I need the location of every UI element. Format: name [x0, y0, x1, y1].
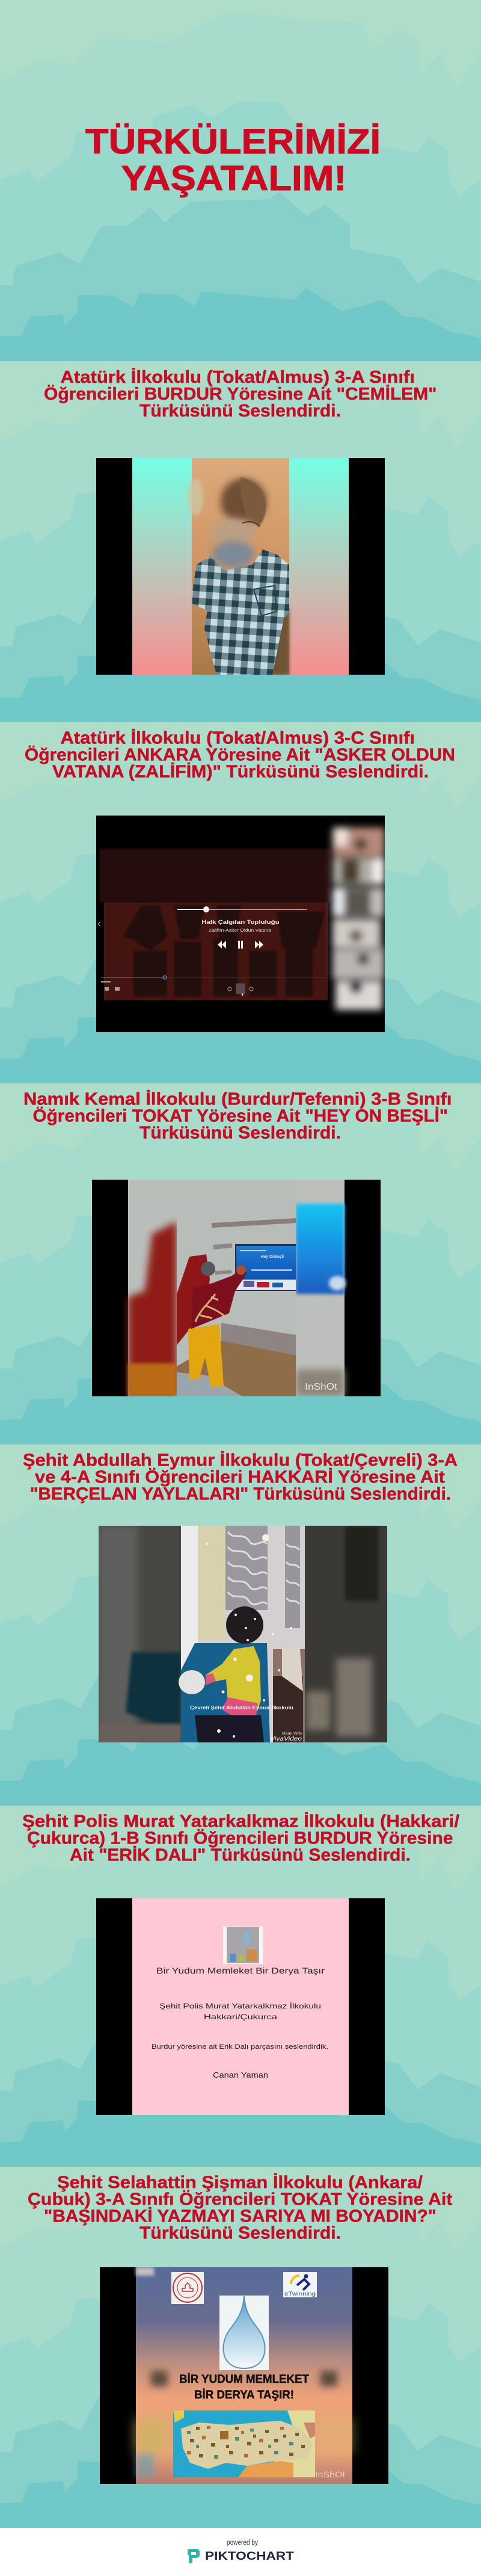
video still: girl in yellow on blue chair: [99, 1526, 387, 1742]
room: [177, 1180, 296, 1366]
eTwinning logo: eTwinning: [284, 2291, 316, 2297]
heading: section 6: [28, 2173, 453, 2243]
water drop: [219, 2296, 269, 2370]
curtains: [198, 1526, 305, 1742]
heading: section 2: Öğrencileri ANKARA Yöresine Ait "ASKER OLDUN: [25, 745, 455, 764]
player controls: [98, 906, 326, 996]
Turkey map: [173, 2410, 315, 2477]
video still: girl in costume pointing at TV: Hey Onbeşli: [261, 1255, 284, 1259]
video still: girl in yellow on blue chair: VivaVideo: [270, 1736, 302, 1742]
poster slogan: BİR DERYA TAŞIR!: [194, 2389, 294, 2401]
heading: section 4: "BERÇELAN YAYLALARI" Türküsünü Seslendirdi.: [30, 1484, 451, 1503]
heading: section 3: Namık Kemal İlkokulu (Burdur/Tefenni) 3-B Sınıfı: [23, 1089, 452, 1109]
player controls: Halk Çalgıları Topluluğu: [202, 919, 280, 926]
poster slogan: BİR YUDUM MEMLEKET: [179, 2373, 309, 2386]
title: [85, 122, 381, 198]
heading: section 5: Ait "ERİK DALI" Türküsünü Seslendirdi.: [70, 1845, 411, 1865]
footer: Piktochart logo: [188, 2549, 294, 2563]
heading: section 3: Öğrencileri TOKAT Yöresine Ait "HEY ON BEŞLİ": [32, 1106, 448, 1125]
video still: pink title card: Bir Yudum Memleket Bir Derya Taşır: [156, 1966, 325, 1975]
girl: [177, 1254, 210, 1345]
heading: section 4: Şehit Abdullah Eymur İlkokulu (Tokat/Çevreli) 3-A: [23, 1451, 458, 1470]
child: [226, 1606, 263, 1644]
video still: pink title card: [96, 1898, 385, 2115]
heading: section 4: ve 4-A Sınıfı Öğrencileri HAKKARİ Yöresine Ait: [35, 1467, 446, 1487]
heading: section 2: Atatürk İlkokulu (Tokat/Almus) 3-C Sınıfı: [60, 728, 415, 748]
video still: pink title card: Şehit Polis Murat Yatarkalkmaz İlkokulu: [159, 2002, 321, 2010]
video still: girl in costume pointing at TV: [92, 1180, 381, 1396]
sparkles: [206, 1534, 292, 1738]
video still: project poster with water drop and map: [100, 2267, 388, 2484]
heading: section 2: [25, 728, 455, 781]
heading: section 3: [23, 1089, 452, 1142]
title: YAŞATALIM!: [121, 159, 346, 198]
participants panel: [332, 828, 385, 1010]
heading: section 5: Çukurca) 1-B Sınıfı Öğrencileri BURDUR Yöresine: [27, 1828, 453, 1848]
thumbnail poster: [223, 1927, 263, 1964]
heading: section 1: Türküsünü Seslendirdi.: [139, 401, 341, 421]
video still: girl in yellow on blue chair: Çevreli Şehit Abdullah Eymur İlkokulu: [190, 1704, 293, 1711]
video still: pink title card: Canan Yaman: [213, 2070, 268, 2079]
heading: section 2: VATANA (ZALİFİM)" Türküsünü Seslendirdi.: [52, 762, 429, 781]
heading: section 6: Şehit Selahattin Şişman İlkokulu (Ankara/: [57, 2173, 423, 2192]
heading: section 5: Şehit Polis Murat Yatarkalkmaz İlkokulu (Hakkari/: [22, 1812, 459, 1831]
eTwinning logo: [283, 2272, 317, 2297]
heading: section 1: [44, 368, 437, 421]
musicians silhouettes: [123, 906, 325, 996]
video still: pink title card: Burdur yöresine ait Erik Dalı parçasını seslendirdik.: [152, 2043, 328, 2051]
heading: section 6: Çubuk) 3-A Sınıfı Öğrencileri TOKAT Yöresine Ait: [28, 2190, 453, 2209]
heading: section 6: Türküsünü Seslendirdi.: [139, 2223, 341, 2243]
footer: Piktochart logo: PIKTOCHART: [205, 2550, 294, 2563]
player controls: Zalifim-Asker Oldun Vatana: [209, 927, 272, 933]
heading: section 5: [22, 1812, 459, 1865]
heading: section 3: Türküsünü Seslendirdi.: [139, 1123, 341, 1142]
poster slogan: [179, 2373, 309, 2401]
heading: section 4: [23, 1451, 458, 1503]
video still: girl in yellow on blue chair: Made With: [282, 1732, 302, 1736]
TV: [235, 1244, 296, 1291]
chair and surroundings: [273, 1649, 305, 1742]
video still: boy in checked shirt: [96, 458, 385, 675]
footer: powered by: powered by: [227, 2539, 258, 2547]
title: TÜRKÜLERİMİZİ: [85, 122, 381, 161]
video still: project poster with water drop and map: InShOt: [315, 2469, 345, 2479]
heading: section 1: Öğrencileri BURDUR Yöresine Ait "CEMİLEM": [44, 385, 437, 404]
MEB logo: [171, 2272, 204, 2304]
video still: music player screen share: [96, 816, 385, 1032]
video still: pink title card: Hakkari/Çukurca: [204, 2013, 277, 2021]
heading: section 6: "BAŞINDAKİ YAZMAYI SARIYA MI BOYADIN?": [44, 2206, 437, 2226]
heading: section 1: Atatürk İlkokulu (Tokat/Almus) 3-A Sınıfı: [60, 368, 415, 387]
video still: girl in costume pointing at TV: InShOt: [305, 1382, 338, 1392]
